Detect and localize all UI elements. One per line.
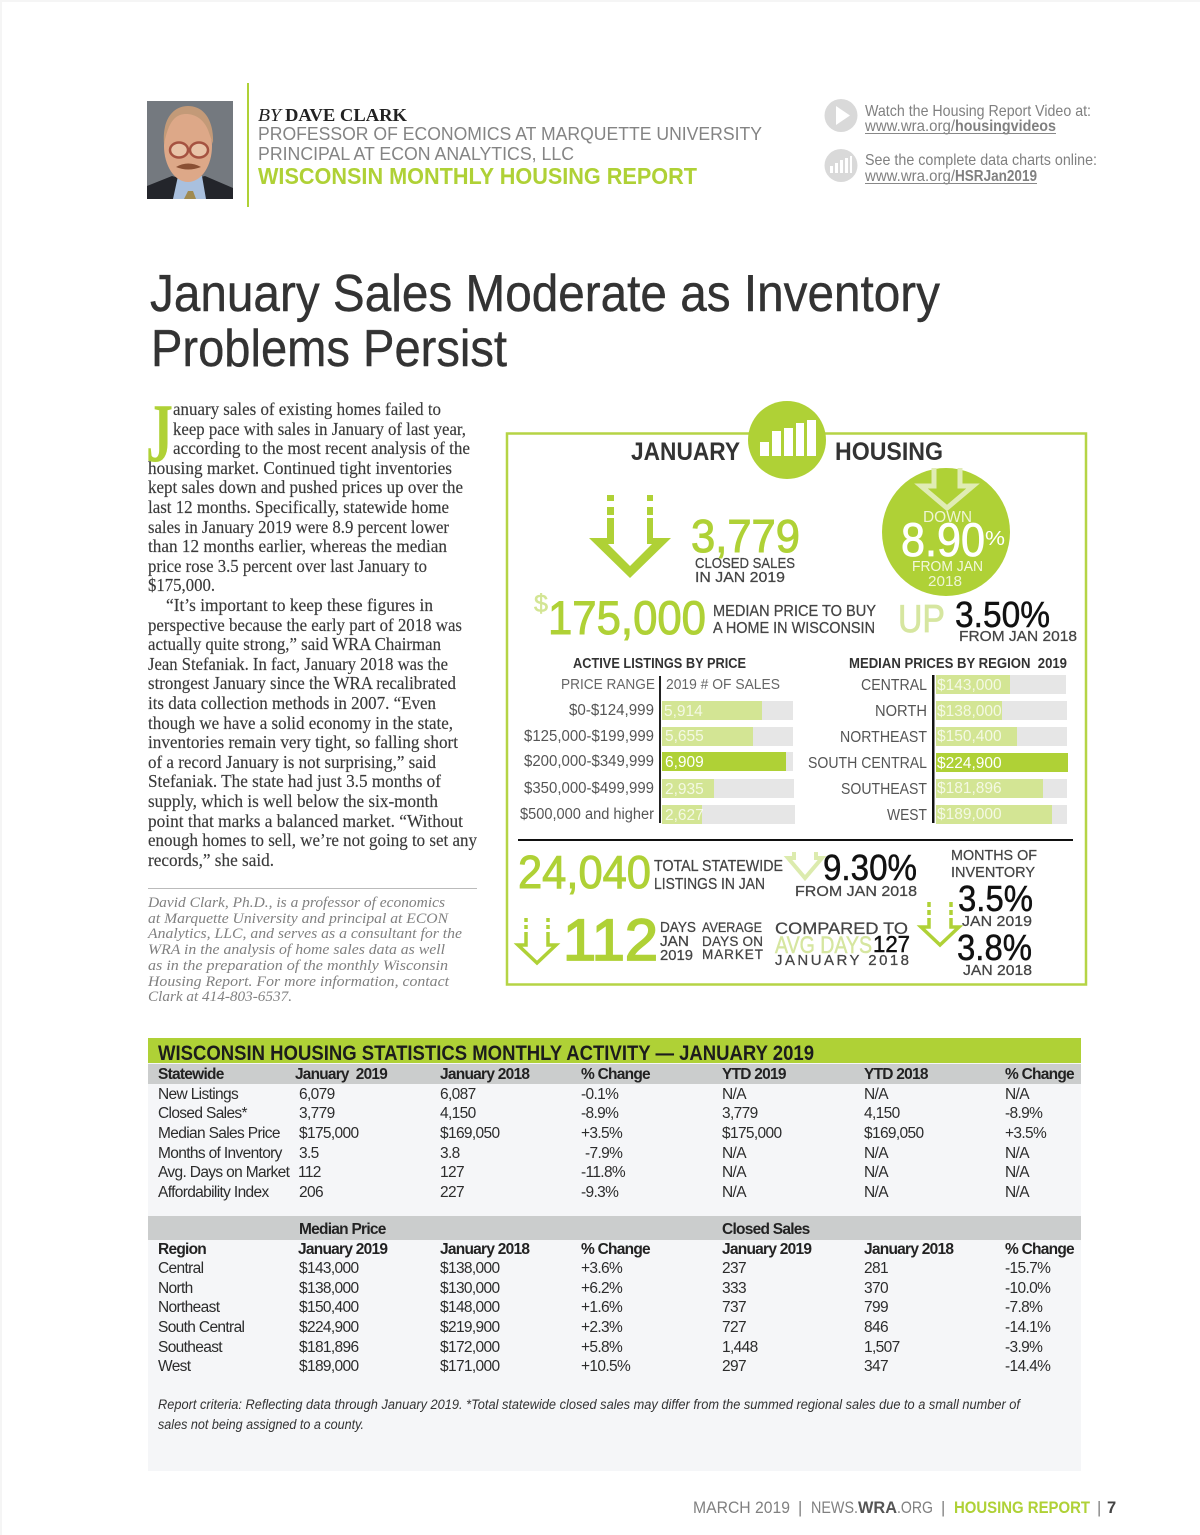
regional data rows: 1,448 [722,1339,758,1356]
regional group header [148,1216,1081,1240]
chart: median prices by region: MEDIAN PRICES BY REGION 2019 [849,656,1067,672]
regional data rows: $143,000 [299,1260,359,1277]
stat: months of inventory: JAN 2019 [962,914,1032,930]
badge: down 8.90%: % [985,528,1005,550]
regional data rows: +5.8% [581,1339,623,1356]
regional data rows: 297 [722,1358,746,1375]
data charts link: See the complete data charts online: [865,152,1097,169]
chart: median prices by region: $224,900 [937,755,1002,772]
statewide data rows: -0.1% [581,1086,619,1103]
stat: months of inventory: INVENTORY [951,864,1035,881]
stat: days on market: 2019 [660,948,693,964]
chart: median prices by region: $143,000 [937,677,1002,694]
chart: active listings by price: 5,914 [664,703,703,720]
statewide data rows: New Listings [158,1086,239,1103]
statewide data rows: Avg. Days on Market [158,1164,291,1181]
statewide data rows: 127 [440,1164,464,1181]
regional data rows: 846 [864,1319,888,1336]
regional header row: % Change [581,1241,651,1258]
article body: of a record January is not surprising,” said [148,752,436,772]
regional data rows: $224,900 [299,1319,359,1336]
byline block: PROFESSOR OF ECONOMICS AT MARQUETTE UNIVERSITY [258,124,762,144]
icon: days on market arrow [518,918,556,963]
statewide data rows: Affordability Index [158,1184,269,1201]
badge: down 8.90%: FROM JAN [912,558,983,575]
article body: “It’s important to keep these figures in [166,595,433,615]
regional data rows: -14.4% [1005,1358,1051,1375]
chart: active listings by price: 2019 # OF SALES [666,676,780,693]
regional data rows: $138,000 [299,1280,359,1297]
article body: keep pace with sales in January of last year, [173,419,466,439]
article body: point that marks a balanced market. “Without [148,811,463,831]
icon: inventory down arrow [921,902,959,945]
stat: compared to 127 days: AVG DAYS [775,932,872,959]
chart: median prices by region: NORTHEAST [840,729,927,746]
article body: though we have a solid economy in the state, [148,713,453,733]
drop cap: J [146,387,173,480]
regional data rows: $138,000 [440,1260,500,1277]
statewide data rows: -8.9% [1005,1105,1043,1122]
badge: down 8.90% [882,468,1010,596]
article body: actually quite strong,” said WRA Chairman [148,634,441,654]
statewide data rows: 206 [299,1184,323,1201]
regional data rows: +6.2% [581,1280,623,1297]
regional data rows: South Central [158,1319,245,1336]
stat: total listings: 24,040 [518,846,651,898]
badge: down 8.90%: DOWN [923,509,972,526]
statewide data rows: Closed Sales* [158,1105,248,1122]
regional data rows: 281 [864,1260,888,1277]
statewide header row: Statewide [158,1066,225,1083]
author bio: at Marquette University and principal at ECON [148,911,449,927]
regional data rows: Northeast [158,1299,221,1316]
regional data rows: 333 [722,1280,746,1297]
regional data rows: 799 [864,1299,888,1316]
icon: housing bar chart circle [748,401,826,479]
chart: active listings by price: $0-$124,999 [569,702,654,719]
article body: last 12 months. Specifically, statewide home [148,497,449,517]
byline block: PRINCIPAL AT ECON ANALYTICS, LLC [258,144,574,164]
stat: days on market: AVERAGE [702,920,762,935]
statewide data rows: N/A [722,1086,747,1103]
article body: strongest January since the WRA recalibrated [148,673,456,693]
stat: median price: $ [534,590,548,618]
chart: active listings by price: $350,000-$499,999 [524,780,654,797]
stat: compared to 127 days: 127 [873,931,910,957]
data charts link: HSRJan2019 [955,168,1037,185]
icon: large down arrow [589,495,671,578]
article body: Jean Stefaniak. In fact, January 2018 was the [148,654,448,674]
statewide data rows: +3.5% [581,1125,623,1142]
article body: sales in January 2019 were 8.9 percent lower [148,517,449,537]
statewide data rows: N/A [864,1086,889,1103]
statewide data rows: +3.5% [1005,1125,1047,1142]
chart: median prices by region: $150,400 [937,728,1002,745]
stat: closed sales: 3,779 [691,510,800,562]
title [150,265,940,378]
report criteria footnote [158,1397,1021,1432]
stat: months of inventory: 3.5% [958,878,1033,919]
report criteria footnote: Report criteria: Reflecting data through January 2019. *Total statewide closed sales may differ from the summed regional sales due to a small number of [158,1397,1021,1412]
regional data rows: -10.0% [1005,1280,1051,1297]
statewide data rows: -9.3% [581,1184,619,1201]
statewide data rows: N/A [722,1164,747,1181]
article body: perspective because the early part of 2018 was [148,615,462,635]
statewide data rows: 227 [440,1184,464,1201]
infographic heading [631,438,943,466]
stat: median price: A HOME IN WISCONSIN [713,620,875,637]
article body: records,” she said. [148,850,274,870]
stat: days on market [563,908,763,973]
badge: down 8.90%: 8.90 [901,513,985,566]
video link [864,103,1091,135]
icon: play video [824,99,858,132]
stat: days on market: 112 [563,908,658,973]
stat: total listings [518,846,783,898]
page footer: 7 [1107,1499,1116,1517]
statewide data rows: N/A [864,1145,889,1162]
regional group header: Closed Sales [722,1221,810,1238]
stat: median price: MEDIAN PRICE TO BUY [713,603,876,620]
byline block [258,105,762,189]
stat: compared to 127 days: COMPARED TO [775,919,908,938]
regional data rows: $171,000 [440,1358,500,1375]
regional data rows: -3.9% [1005,1339,1043,1356]
stat: total listings: LISTINGS IN JAN [654,876,765,893]
statewide data rows: 4,150 [864,1105,901,1122]
article body: its data collection methods in 2007. “Even [148,693,436,713]
statewide data rows: 3.5 [299,1145,319,1162]
stat: days on market: DAYS ON [702,934,763,949]
icon: bar chart [824,149,858,182]
regional data rows: +10.5% [581,1358,631,1375]
article body: than 12 months earlier, whereas the median [148,536,447,556]
regional data rows: -7.8% [1005,1299,1043,1316]
page footer: MARCH 2019 [693,1499,790,1517]
article body: anuary sales of existing homes failed to [173,399,441,419]
stat: days on market: JAN [660,934,689,950]
regional data rows: -14.1% [1005,1319,1051,1336]
page footer: .ORG [897,1499,933,1517]
chart: active listings by price: $125,000-$199,999 [524,728,654,745]
stat: closed sales [691,510,800,586]
regional data rows: -15.7% [1005,1260,1051,1277]
statewide data rows: -7.9% [585,1145,623,1162]
author bio: Analytics, LLC, and serves as a consultant for the [147,926,462,942]
byline block: BY [258,105,283,125]
author bio: as in the preparation of the monthly Wisconsin [148,958,448,974]
stat: up 3.50%: 3.50% [955,594,1050,635]
stat: up 3.50%: UP [898,598,945,641]
statewide data rows: N/A [722,1184,747,1201]
stat: listings down 9.30%: FROM JAN 2018 [795,883,917,900]
statewide data rows: 3,779 [722,1105,758,1122]
video link: Watch the Housing Report Video at: [865,103,1091,120]
regional data rows: 727 [722,1319,746,1336]
regional data rows: $181,896 [299,1339,358,1356]
stat: days on market: MARKET [702,947,763,962]
regional header row: % Change [1005,1241,1075,1258]
statewide data rows: 6,079 [299,1086,335,1103]
regional data rows: +2.3% [581,1319,623,1336]
title: Problems Persist [151,320,507,378]
author bio [147,888,477,1005]
regional data rows: 737 [722,1299,746,1316]
statewide data rows: N/A [1005,1145,1030,1162]
infographic heading: HOUSING [835,438,943,466]
chart: median prices by region: WEST [887,807,927,824]
stat: total listings: TOTAL STATEWIDE [654,858,783,875]
author bio: WRA in the analysis of home sales data as well [148,942,445,958]
chart: median prices by region: SOUTH CENTRAL [808,755,927,772]
regional header row [158,1241,1075,1258]
stat: up 3.50%: FROM JAN 2018 [959,628,1077,645]
chart: active listings by price: ACTIVE LISTINGS BY PRICE [573,656,746,672]
regional data rows: Central [158,1260,204,1277]
panel: statistics table [148,1038,1081,1471]
regional data rows: 347 [864,1358,888,1375]
statewide data rows: Median Sales Price [158,1125,280,1142]
stat: listings down 9.30% [795,847,917,900]
regional data rows [158,1260,1051,1375]
article body: Stefaniak. The state had just 3.5 months of [148,771,441,791]
stat: months of inventory [951,847,1037,979]
author bio: Clark at 414-803-6537. [148,989,292,1005]
chart: median prices by region: $138,000 [937,703,1002,720]
chart: active listings by price [520,656,795,824]
page footer: NEWS. [811,1499,858,1517]
chart: median prices by region: $181,896 [937,780,1002,797]
statewide header row: % Change [581,1066,651,1083]
statewide data rows: 6,087 [440,1086,476,1103]
statewide data rows: 4,150 [440,1105,477,1122]
article body: enough homes to sell, we’re not going to set any [148,830,477,850]
page footer: | [941,1499,945,1517]
regional data rows: West [158,1358,192,1375]
regional data rows: Southeast [158,1339,223,1356]
table title bar: WISCONSIN HOUSING STATISTICS MONTHLY ACTIVITY — JANUARY 2019 [158,1042,814,1065]
statewide header row: January 2019 [295,1066,388,1083]
statewide data rows: 3.8 [440,1145,460,1162]
chart: median prices by region: NORTH [875,703,927,720]
statewide header row: January 2018 [440,1066,530,1083]
regional header row: January 2019 [722,1241,812,1258]
statewide header row: % Change [1005,1066,1075,1083]
stat: median price [534,590,876,644]
regional data rows: $219,900 [440,1319,500,1336]
regional header row: January 2019 [298,1241,388,1258]
regional group header: Median Price [299,1221,387,1238]
page footer: HOUSING REPORT [954,1499,1090,1517]
statewide header row: YTD 2018 [864,1066,929,1083]
statewide data rows: 3,779 [299,1105,335,1122]
stat: median price: 175,000 [548,591,706,644]
regional data rows: 1,507 [864,1339,900,1356]
byline block: DAVE CLARK [285,105,407,125]
article body: supply, which is well below the six-month [148,791,438,811]
chart: active listings by price: PRICE RANGE [561,676,655,693]
regional data rows: 370 [864,1280,889,1297]
article body: price rose 3.5 percent over last January to [148,556,427,576]
statewide data rows: N/A [722,1145,747,1162]
statewide header row [148,1064,1081,1084]
chart: median prices by region [808,656,1068,824]
stat: closed sales: IN JAN 2019 [695,569,785,586]
page footer [693,1499,1116,1517]
page footer: | [798,1499,802,1517]
report criteria footnote: sales not being assigned to a county. [158,1417,364,1432]
statewide data rows: N/A [1005,1184,1030,1201]
article body: inventories remain very tight, so falling short [148,732,458,752]
chart: median prices by region: CENTRAL [861,677,927,694]
statewide data rows: Months of Inventory [158,1145,283,1162]
article body [148,399,477,870]
stat: months of inventory: 3.8% [957,927,1032,968]
stat: days on market: DAYS [660,920,696,936]
infographic heading: JANUARY [631,438,740,466]
panel: January housing infographic [507,401,1086,984]
badge: down 8.90%: 2018 [928,573,962,590]
stat: up 3.50% [898,594,1077,645]
author bio: David Clark, Ph.D., is a professor of economics [147,895,445,911]
article body: kept sales down and pushed prices up over the [148,477,463,497]
page footer: | [1097,1499,1101,1517]
regional data rows: $150,400 [299,1299,359,1316]
article body: $175,000. [148,575,215,595]
video link: www.wra.org/ [864,118,956,135]
statewide data rows [158,1086,1047,1201]
chart: median prices by region: $189,000 [937,806,1002,823]
regional data rows: $189,000 [299,1358,359,1375]
table title bar [148,1038,1081,1065]
regional header row: Region [158,1241,206,1258]
chart: active listings by price: $200,000-$349,999 [524,753,654,770]
statewide data rows: 112 [298,1164,321,1181]
header divider [247,83,249,207]
title: January Sales Moderate as Inventory [150,265,940,323]
statewide data rows: N/A [1005,1164,1030,1181]
regional data rows: $148,000 [440,1299,500,1316]
regional data rows: North [158,1280,193,1297]
article body: housing market. Continued tight inventories [148,458,452,478]
chart: active listings by price: 2,627 [665,807,704,824]
author bio: Housing Report. For more information, contact [147,974,450,990]
statewide data rows: -11.8% [581,1164,626,1181]
stat: listings down 9.30%: 9.30% [823,847,917,888]
stat: compared to 127 days: JANUARY 2018 [775,952,909,969]
data charts link: www.wra.org/ [864,168,956,185]
regional data rows: $172,000 [440,1339,500,1356]
stat: closed sales: CLOSED SALES [695,555,795,572]
page footer: WRA [858,1499,897,1517]
chart: median prices by region: SOUTHEAST [841,781,927,798]
video link: housingvideos [955,118,1056,135]
author photo [147,101,233,199]
regional header row: January 2018 [864,1241,954,1258]
byline block: WISCONSIN MONTHLY HOUSING REPORT [258,163,697,189]
chart: active listings by price: $500,000 and higher [520,806,654,823]
statewide data rows: $175,000 [722,1125,782,1142]
chart: active listings by price: 6,909 [665,754,704,771]
icon: pale down arrow [788,852,822,878]
regional data rows: 237 [722,1260,746,1277]
statewide data rows: $175,000 [299,1125,359,1142]
stat: months of inventory: JAN 2018 [963,963,1032,979]
statewide data rows: $169,050 [440,1125,500,1142]
statewide header row: YTD 2019 [722,1066,787,1083]
data charts link [864,152,1097,185]
stat: compared to 127 days [775,919,910,969]
regional data rows: +1.6% [581,1299,623,1316]
stat: months of inventory: MONTHS OF [951,847,1037,864]
regional header row: January 2018 [440,1241,530,1258]
statewide data rows: N/A [1005,1086,1030,1103]
regional data rows: +3.6% [581,1260,623,1277]
statewide data rows: N/A [864,1164,889,1181]
statewide data rows: N/A [864,1184,889,1201]
statewide data rows: -8.9% [581,1105,619,1122]
chart: active listings by price: 5,655 [665,728,704,745]
chart: active listings by price: 2,935 [665,781,704,798]
article body: according to the most recent analysis of the [173,438,470,458]
statewide data rows: $169,050 [864,1125,924,1142]
regional data rows: $130,000 [440,1280,500,1297]
